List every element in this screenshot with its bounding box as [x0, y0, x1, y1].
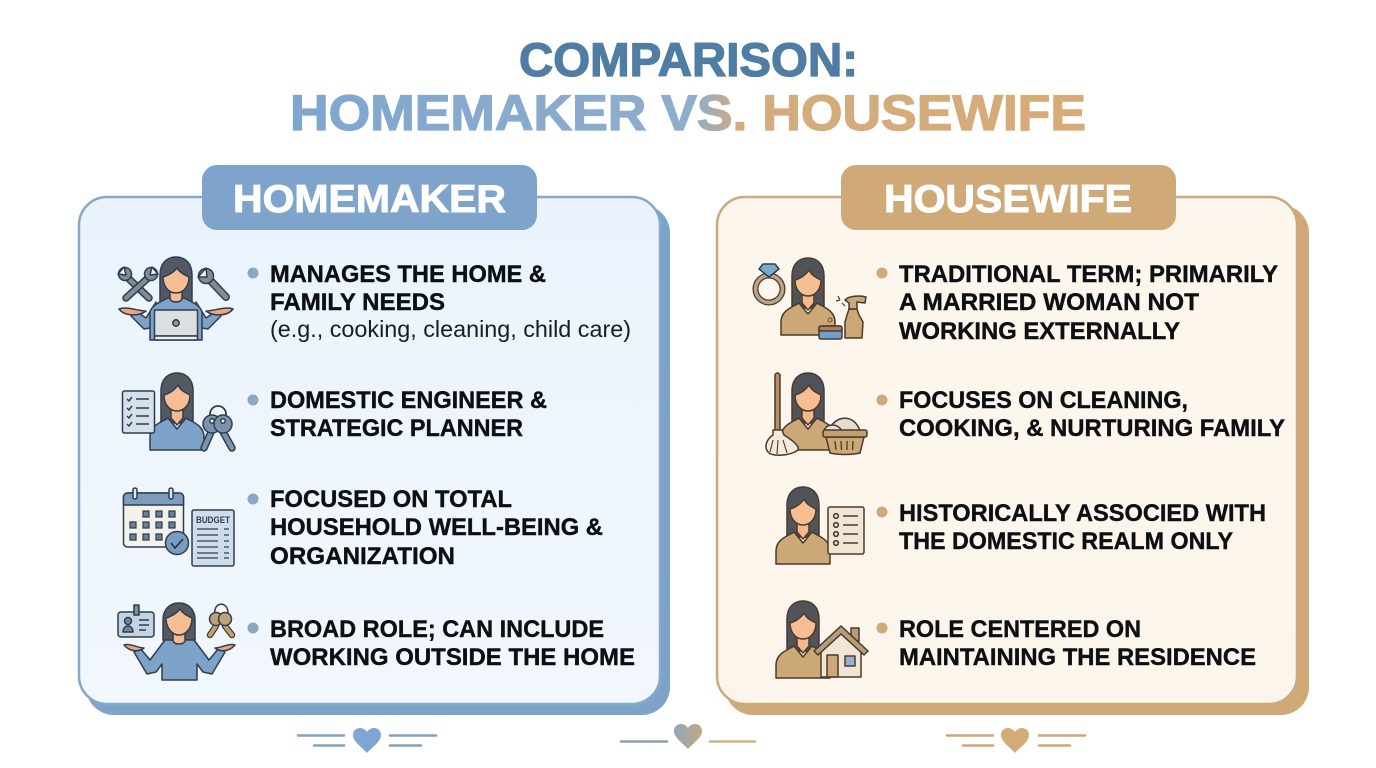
icon: woman with badge and keys	[118, 603, 235, 680]
icon: woman with tools and laptop	[118, 257, 233, 340]
text: manages: (e.g., cooking, cleaning, child care)	[270, 316, 631, 342]
text: role centered: MAINTAINING THE RESIDENCE	[899, 644, 1256, 671]
icon: woman with checklist and keys	[122, 373, 232, 450]
text: traditional term: WORKING EXTERNALLY	[899, 318, 1180, 345]
bullet	[876, 506, 888, 518]
text: manages	[270, 261, 631, 342]
bullet	[876, 622, 888, 634]
icon: woman with list	[776, 487, 864, 564]
text: domestic engineer: STRATEGIC PLANNER	[270, 415, 523, 442]
text: historically: HISTORICALLY ASSOCIED WITH	[899, 500, 1266, 527]
icon: woman with mop and laundry basket	[766, 373, 867, 455]
text: focused on: HOUSEHOLD WELL-BEING &	[270, 514, 603, 541]
bullet	[248, 268, 258, 278]
text: focuses on: FOCUSES ON CLEANING,	[899, 387, 1188, 414]
title: COMPARISON:	[519, 33, 858, 86]
text: focused on: ORGANIZATION	[270, 543, 455, 570]
text: domestic engineer	[270, 387, 547, 442]
text: historically: THE DOMESTIC REALM ONLY	[899, 528, 1233, 555]
bullet	[248, 494, 258, 504]
icon: calendar and budget: BUDGET	[196, 515, 230, 525]
text: focused on: FOCUSED ON TOTAL	[270, 486, 512, 513]
text: broad role	[270, 616, 635, 671]
bullet	[248, 622, 258, 634]
icon: calendar and budget	[124, 488, 234, 566]
icon: woman with ring and cleaning supplies	[756, 258, 866, 339]
bullet	[248, 394, 258, 406]
title: HOMEMAKER VS. HOUSEWIFE	[290, 85, 1086, 141]
text: domestic engineer: DOMESTIC ENGINEER &	[270, 387, 547, 414]
text: focuses on: COOKING, & NURTURING FAMILY	[899, 415, 1285, 442]
text: traditional term: A MARRIED WOMAN NOT	[899, 289, 1199, 316]
text: broad role: WORKING OUTSIDE THE HOME	[270, 644, 635, 671]
panel: homemaker	[79, 165, 670, 715]
text: manages: FAMILY NEEDS	[270, 289, 445, 316]
text: traditional term: TRADITIONAL TERM; PRIMARILY	[899, 261, 1278, 288]
bullet	[876, 394, 888, 406]
footer ornament: blue heart	[298, 728, 436, 753]
heading: homemaker: HOMEMAKER	[233, 178, 506, 221]
footer ornament: mixed heart	[621, 724, 755, 749]
text: historically	[899, 500, 1266, 555]
text: role centered	[899, 616, 1256, 671]
text: focuses on	[899, 387, 1285, 442]
text: role centered: ROLE CENTERED ON	[899, 616, 1141, 643]
text: broad role: BROAD ROLE; CAN INCLUDE	[270, 616, 604, 643]
text: traditional term	[899, 261, 1278, 345]
footer ornament: tan heart	[947, 728, 1085, 753]
bullet	[876, 268, 888, 278]
heading: housewife	[841, 165, 1176, 230]
icon: woman with house	[776, 601, 868, 678]
title	[290, 33, 1086, 141]
text: focused on	[270, 486, 603, 570]
panel: housewife	[717, 165, 1309, 715]
heading: homemaker	[202, 165, 537, 230]
text: manages: MANAGES THE HOME &	[270, 261, 546, 288]
heading: housewife: HOUSEWIFE	[884, 178, 1132, 221]
